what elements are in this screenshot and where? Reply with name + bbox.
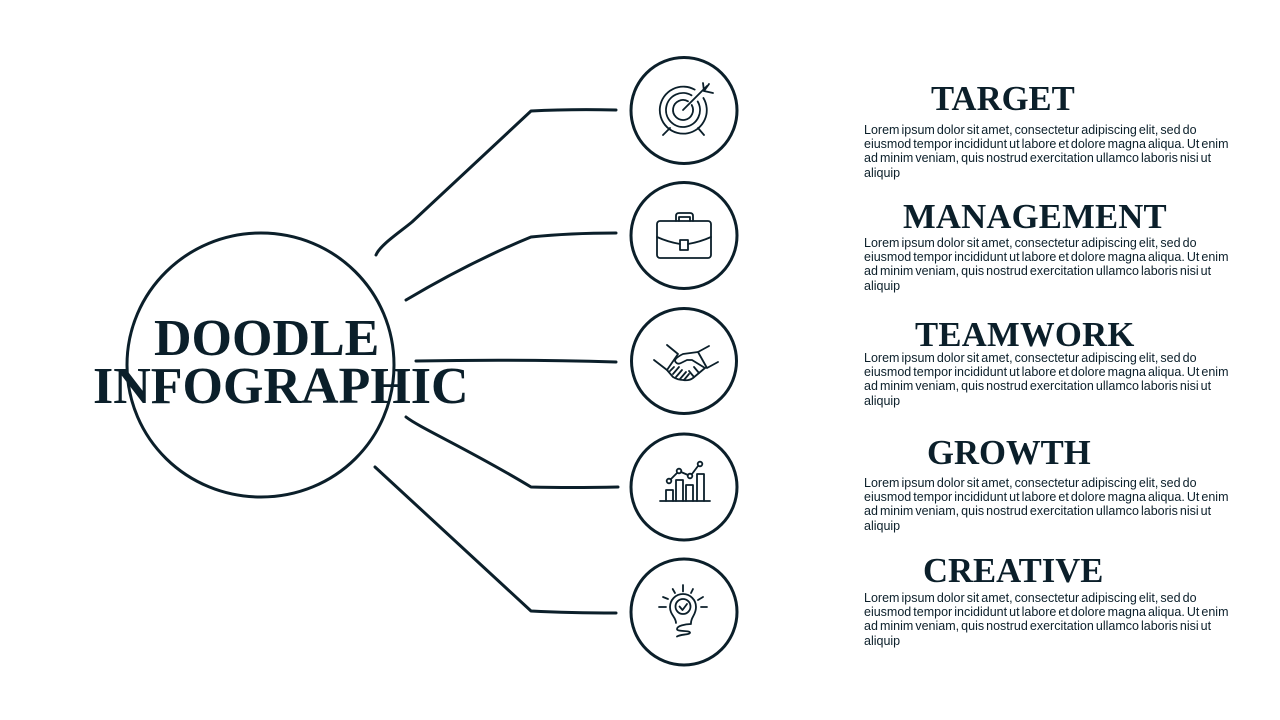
- text: target: [864, 123, 1228, 180]
- text: growth: eiusmod tempor incididunt ut labore et dolore magna aliqua. Ut enim: [864, 490, 1228, 504]
- text: creative: aliquip: [864, 634, 900, 648]
- main circle: [127, 233, 394, 497]
- connector: management: [406, 233, 616, 300]
- text: teamwork: eiusmod tempor incididunt ut labore et dolore magna aliqua. Ut enim: [864, 365, 1228, 379]
- text: teamwork: ad minim veniam, quis nostrud exercitation ullamco laboris nisi ut: [864, 379, 1211, 393]
- text: management: aliquip: [864, 279, 900, 293]
- icon: handshake: [654, 345, 718, 380]
- text: creative: eiusmod tempor incididunt ut labore et dolore magna aliqua. Ut enim: [864, 605, 1228, 619]
- icon: target: [660, 83, 713, 135]
- heading: teamwork: TEAMWORK: [915, 316, 1135, 354]
- text: target: eiusmod tempor incididunt ut labore et dolore magna aliqua. Ut enim: [864, 137, 1228, 151]
- text: target: Lorem ipsum dolor sit amet, consectetur adipiscing elit, sed do: [864, 123, 1197, 137]
- circle: management: [631, 182, 737, 288]
- text: management: [864, 236, 1228, 293]
- text: target: ad minim veniam, quis nostrud exercitation ullamco laboris nisi ut: [864, 151, 1211, 165]
- icon: growth chart: [660, 462, 710, 501]
- text: target: aliquip: [864, 166, 900, 180]
- heading: growth: GROWTH: [927, 434, 1091, 472]
- connector: teamwork: [416, 360, 616, 362]
- icon: light bulb: [659, 585, 707, 636]
- text: teamwork: [864, 351, 1228, 408]
- heading: creative: CREATIVE: [923, 552, 1103, 590]
- connector: target: [376, 110, 616, 255]
- circle: teamwork: [632, 308, 736, 414]
- text: teamwork: Lorem ipsum dolor sit amet, consectetur adipiscing elit, sed do: [864, 351, 1197, 365]
- text: management: ad minim veniam, quis nostrud exercitation ullamco laboris nisi ut: [864, 264, 1211, 278]
- heading: management: MANAGEMENT: [903, 198, 1167, 236]
- text: growth: aliquip: [864, 519, 900, 533]
- title line 1: DOODLE: [154, 310, 379, 367]
- text: management: Lorem ipsum dolor sit amet, consectetur adipiscing elit, sed do: [864, 236, 1197, 250]
- title: [93, 310, 469, 415]
- connector: growth: [406, 417, 618, 488]
- title line 2: INFOGRAPHIC: [93, 358, 469, 415]
- circle: creative: [631, 559, 737, 665]
- text: creative: ad minim veniam, quis nostrud exercitation ullamco laboris nisi ut: [864, 619, 1211, 633]
- icon: briefcase: [657, 213, 711, 258]
- text: creative: Lorem ipsum dolor sit amet, consectetur adipiscing elit, sed do: [864, 591, 1197, 605]
- heading: target: TARGET: [931, 80, 1075, 118]
- circle: growth: [631, 434, 737, 540]
- text: growth: [864, 476, 1228, 533]
- text: growth: ad minim veniam, quis nostrud exercitation ullamco laboris nisi ut: [864, 504, 1211, 518]
- text: creative: [864, 591, 1228, 648]
- text: teamwork: aliquip: [864, 394, 900, 408]
- text: management: eiusmod tempor incididunt ut labore et dolore magna aliqua. Ut enim: [864, 250, 1228, 264]
- circle: target: [631, 58, 737, 164]
- text: growth: Lorem ipsum dolor sit amet, consectetur adipiscing elit, sed do: [864, 476, 1197, 490]
- connector: creative: [375, 467, 616, 613]
